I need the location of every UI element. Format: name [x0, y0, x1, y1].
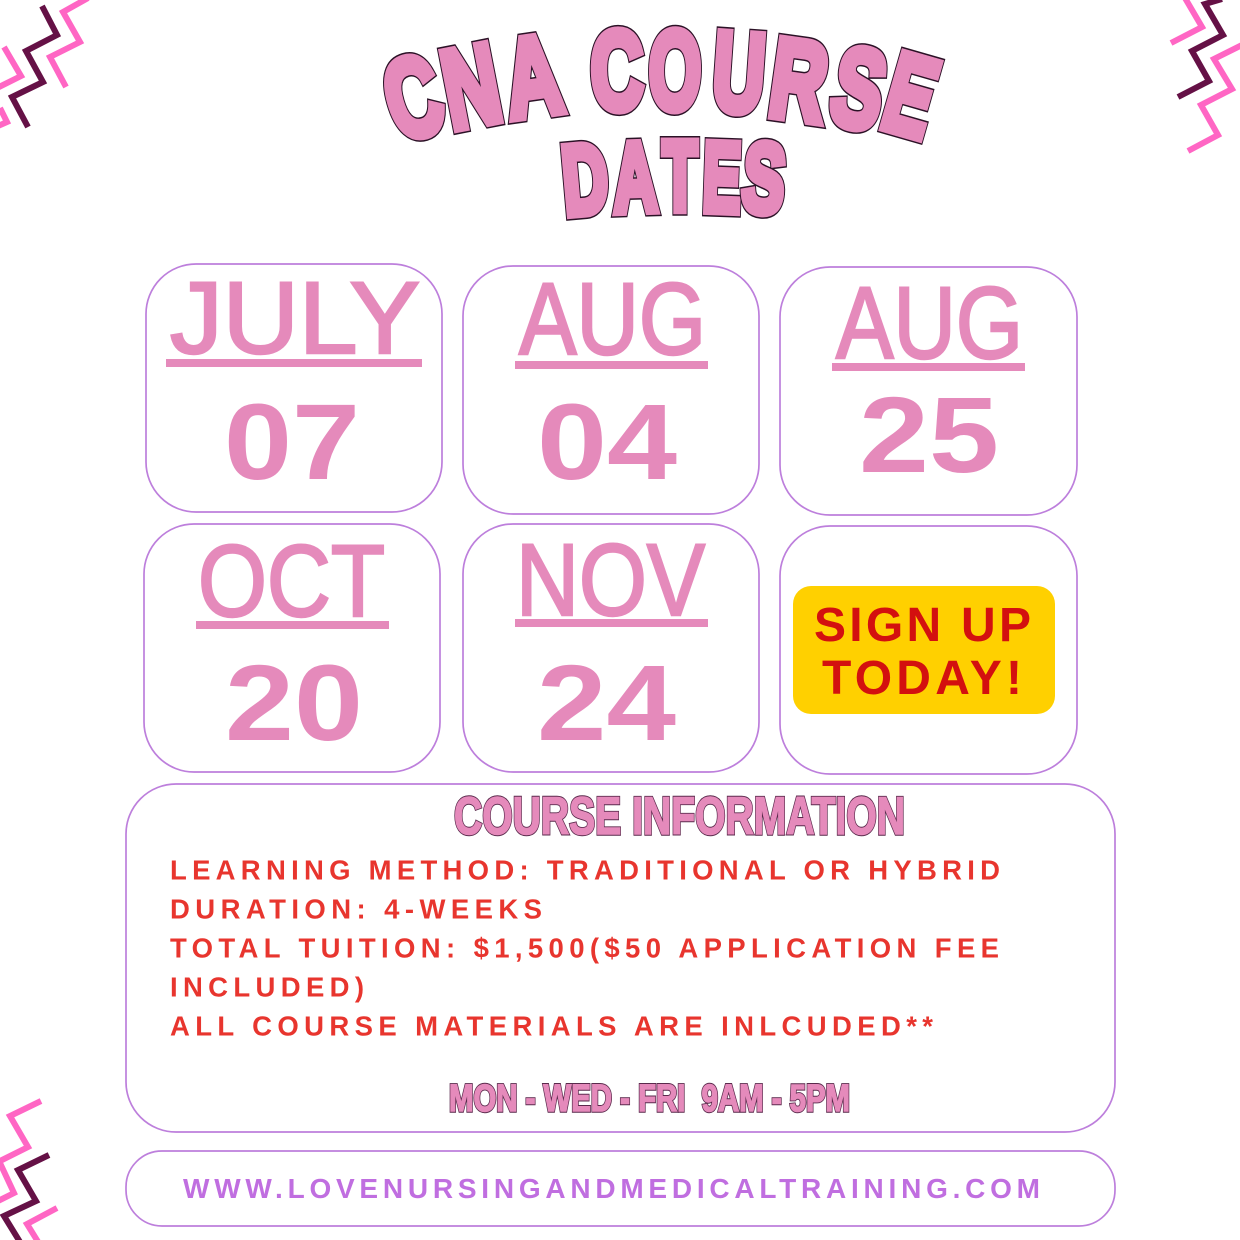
callout: sign up today [793, 586, 1055, 714]
title line: CNA COURSE: U [709, 8, 769, 136]
text block: course details: ALL COURSE MATERIALS ARE INLCUDED** [170, 1010, 933, 1042]
title line: DATES [558, 121, 789, 236]
title line: CNA COURSE: A [497, 12, 569, 143]
title line: DATES: S [738, 123, 789, 235]
title line: DATES: S [738, 123, 789, 235]
text: schedule: MON - WED - FRI 9AM - 5PM [449, 1078, 850, 1120]
panel: July 07: 07 [224, 381, 360, 502]
title [370, 7, 951, 236]
text block: course details: DURATION: 4-WEEKS [170, 894, 542, 924]
panel: July 07: JULY [170, 261, 420, 375]
icon: zigzag bottom left [0, 1101, 57, 1240]
title line: DATES: A [611, 123, 659, 233]
title line: CNA COURSE: C [370, 31, 456, 166]
title line: CNA COURSE: U [709, 8, 769, 136]
panel: Aug 04: AUG [519, 262, 706, 376]
text block: course details: TOTAL TUITION: $1,500($50 APPLICATION FEE [170, 932, 999, 964]
panel: Nov 24: 24 [537, 642, 676, 763]
icon: zigzag top right [1171, 0, 1240, 151]
text block: course details: INCLUDED) [170, 972, 364, 1002]
title line: DATES: A [611, 123, 659, 233]
panel: July 07 [146, 261, 442, 512]
title line: CNA COURSE: E [871, 28, 951, 162]
panel: Aug 25: 25 [859, 374, 999, 495]
panel: Aug 04: 04 [537, 381, 677, 502]
panel: Nov 24 [463, 523, 759, 772]
title line: CNA COURSE: R [763, 16, 835, 147]
title line: CNA COURSE: N [432, 20, 510, 154]
title line: CNA COURSE: O [648, 7, 702, 134]
panel: Aug 04 [463, 262, 759, 514]
title line: CNA COURSE [370, 7, 951, 166]
callout: sign up today: SIGN UP [814, 599, 1031, 652]
panel: website [126, 1151, 1115, 1226]
panel: course information [126, 784, 1115, 1132]
text block: course details [170, 854, 1000, 1042]
panel: Oct 20: OCT [198, 524, 385, 638]
title line: DATES: D [558, 124, 612, 236]
panel: Oct 20: 20 [225, 642, 363, 763]
callout: sign up today: TODAY! [822, 652, 1022, 705]
title line: DATES: E [701, 121, 743, 232]
title line: CNA COURSE: S [821, 23, 896, 155]
title line: CNA COURSE: E [871, 28, 951, 162]
panel: Oct 20 [144, 524, 440, 772]
icon: zigzag top left [0, 0, 88, 127]
text: website url: WWW.LOVENURSINGANDMEDICALTRAINING.COM [183, 1173, 1040, 1204]
text: schedule: MON - WED - FRI 9AM - 5PM [449, 1078, 850, 1120]
title line: CNA COURSE: A [497, 12, 569, 143]
title line: DATES: T [663, 121, 697, 231]
title line: DATES: T [663, 121, 697, 231]
title line: CNA COURSE: O [648, 7, 702, 134]
title line: DATES: E [701, 121, 743, 232]
panel: Aug 25 [780, 266, 1077, 515]
title line: CNA COURSE: C [590, 8, 644, 134]
title line: CNA COURSE: R [763, 16, 835, 147]
title line: CNA COURSE: N [432, 20, 510, 154]
heading: course information: COURSE INFORMATION [454, 787, 905, 846]
title line: CNA COURSE: S [821, 23, 896, 155]
panel: Aug 25: AUG [836, 266, 1023, 380]
heading: course information: COURSE INFORMATION [454, 787, 905, 846]
panel: Nov 24: NOV [516, 523, 705, 637]
text block: course details: LEARNING METHOD: TRADITIONAL OR HYBRID [170, 854, 1000, 886]
title line: CNA COURSE: C [370, 31, 456, 166]
panel: sign up [780, 526, 1077, 774]
title line: CNA COURSE: C [590, 8, 644, 134]
title line: DATES: D [558, 124, 612, 236]
